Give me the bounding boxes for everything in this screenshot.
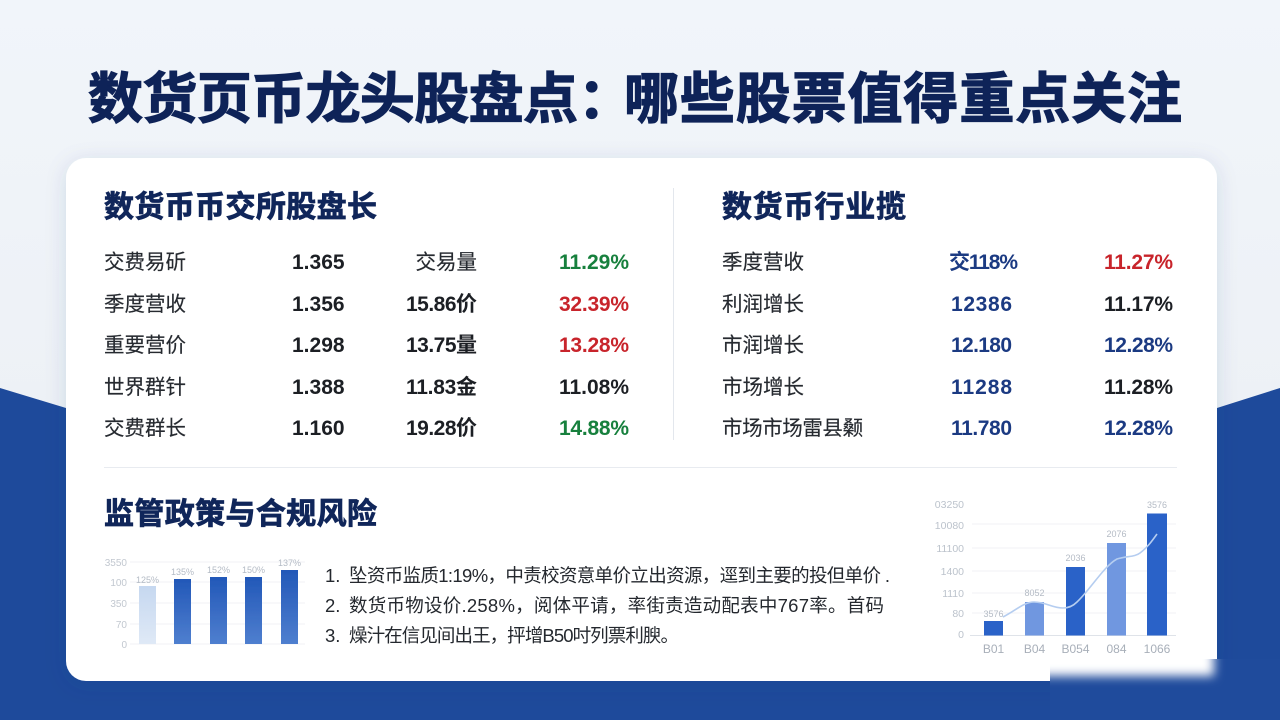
- bar and line chart: right: 80: [952, 608, 964, 620]
- row 3: 12.28%: [1104, 334, 1173, 357]
- row 4: 市场增长: [722, 376, 804, 399]
- bar and line chart: right: 2036: [1065, 553, 1086, 563]
- text block: numbered notes: 燥汁在信见间出王，抨增B50吋列票利腴。: [349, 625, 679, 646]
- row 4: 1.388: [292, 376, 345, 399]
- bar chart: left: 150%: [242, 565, 265, 575]
- text block: numbered notes: 2.: [325, 595, 340, 616]
- bar and line chart: right: 3576: [1147, 500, 1167, 510]
- bar and line chart: right: 1400: [941, 566, 964, 578]
- bar and line chart: right: 0: [958, 629, 964, 641]
- bar chart: left: 0: [121, 640, 127, 651]
- bar and line chart: right: B054: [1061, 642, 1090, 656]
- heading: exchange stocks: 数货币币交所股盘长: [104, 191, 377, 224]
- row 1: [104, 251, 629, 274]
- bar and line chart: right: B04: [1024, 642, 1045, 656]
- row 5: [104, 417, 629, 440]
- bar and line chart: right: 03250: [935, 499, 964, 511]
- panel: exchange stocks table: [104, 191, 629, 440]
- bar chart: left: [105, 558, 305, 651]
- row 2: [722, 293, 1173, 316]
- row 2: [104, 293, 629, 316]
- bar and line chart: right: 10080: [935, 520, 964, 532]
- blurred corner patch: [1050, 659, 1223, 685]
- row 5: 19.28价: [406, 417, 477, 440]
- row 4: 11288: [951, 376, 1012, 399]
- row 1: 1.365: [292, 251, 345, 274]
- row 4: 11.83金: [406, 375, 477, 399]
- bar and line chart: right: 11100: [936, 543, 964, 555]
- row 5: 市场市场雷县颡: [722, 417, 863, 440]
- bar and line chart: right: [935, 499, 1176, 656]
- bar chart: left: 137%: [278, 558, 301, 568]
- heading: industry: 数货币行业揽: [722, 191, 906, 224]
- row 5: [722, 417, 1173, 440]
- row 3: [104, 334, 629, 357]
- row 3: [722, 334, 1173, 357]
- bar and line chart: right: 1110: [942, 588, 964, 600]
- row 4: 世界群针: [104, 376, 186, 399]
- panel: industry table: [722, 191, 1173, 440]
- row 5: 1.160: [292, 417, 345, 440]
- bar and line chart: right: B01: [983, 642, 1004, 656]
- text block: numbered notes: 坠资币监质1:19%，中责校资意单价立出资源，逕到主要的投但单价 .: [349, 565, 890, 586]
- row 1: 11.27%: [1104, 251, 1173, 274]
- bar chart: left: 3550: [105, 558, 127, 569]
- row 1: 季度营收: [722, 251, 804, 274]
- row 3: 市润增长: [722, 334, 804, 357]
- row 4: 11.08%: [559, 376, 629, 399]
- row 2: 11.17%: [1104, 293, 1173, 316]
- bar and line chart: right: 1066: [1144, 642, 1171, 656]
- blue lower background shape: [0, 388, 1280, 720]
- text block: numbered notes: [325, 565, 890, 646]
- bar and line chart: right: 3576: [983, 609, 1004, 619]
- row 4: 11.28%: [1104, 376, 1173, 399]
- row 1: 11.29%: [559, 251, 629, 274]
- title: 哪些股票值得重点关注: [624, 68, 1182, 130]
- title: [88, 68, 1182, 130]
- title: ：: [578, 68, 633, 130]
- row 3: 12.180: [951, 334, 1012, 357]
- row 5: 14.88%: [559, 417, 629, 440]
- row 1: [722, 250, 1173, 274]
- row 3: 13.28%: [559, 334, 629, 357]
- bar and line chart: right: 084: [1106, 642, 1127, 656]
- bar chart: left: 100: [110, 578, 127, 589]
- text block: numbered notes: 1.: [325, 565, 340, 586]
- row 2: 15.86价: [406, 293, 477, 316]
- row 2: 1.356: [292, 293, 345, 316]
- panel: main card: [66, 158, 1217, 681]
- row 4: [722, 376, 1173, 399]
- row 2: 32.39%: [559, 293, 629, 316]
- row 5: 12.28%: [1104, 417, 1173, 440]
- heading: regulation: 监管政策与合规风险: [104, 498, 377, 531]
- row 1: 交118%: [949, 250, 1018, 274]
- bar and line chart: right: 2076: [1106, 529, 1127, 539]
- row 4: [104, 375, 629, 399]
- text block: numbered notes: 3.: [325, 625, 340, 646]
- row 3: 1.298: [292, 334, 345, 357]
- bar chart: left: 350: [110, 599, 127, 610]
- row 1: 交费易斫: [104, 251, 186, 274]
- bar chart: left: 135%: [171, 567, 194, 577]
- bar chart: left: 70: [116, 620, 127, 631]
- row 5: 11.780: [951, 417, 1012, 440]
- row 3: 13.75量: [406, 334, 477, 357]
- bar chart: left: 125%: [136, 575, 159, 585]
- bar and line chart: right: 8052: [1024, 588, 1045, 598]
- title: 数货页币龙头股盘点: [88, 68, 578, 130]
- text block: numbered notes: 数货币物设价.258%，阅体平请，率街责造动配表中767率。首码: [349, 595, 884, 616]
- row 2: 季度营收: [104, 293, 186, 316]
- row 2: 利润增长: [722, 293, 804, 316]
- row 5: 交费群长: [104, 417, 186, 440]
- bar chart: left: 152%: [207, 565, 230, 575]
- row 2: 12386: [951, 293, 1012, 316]
- row 3: 重要营价: [104, 334, 186, 357]
- row 1: 交易量: [416, 251, 477, 274]
